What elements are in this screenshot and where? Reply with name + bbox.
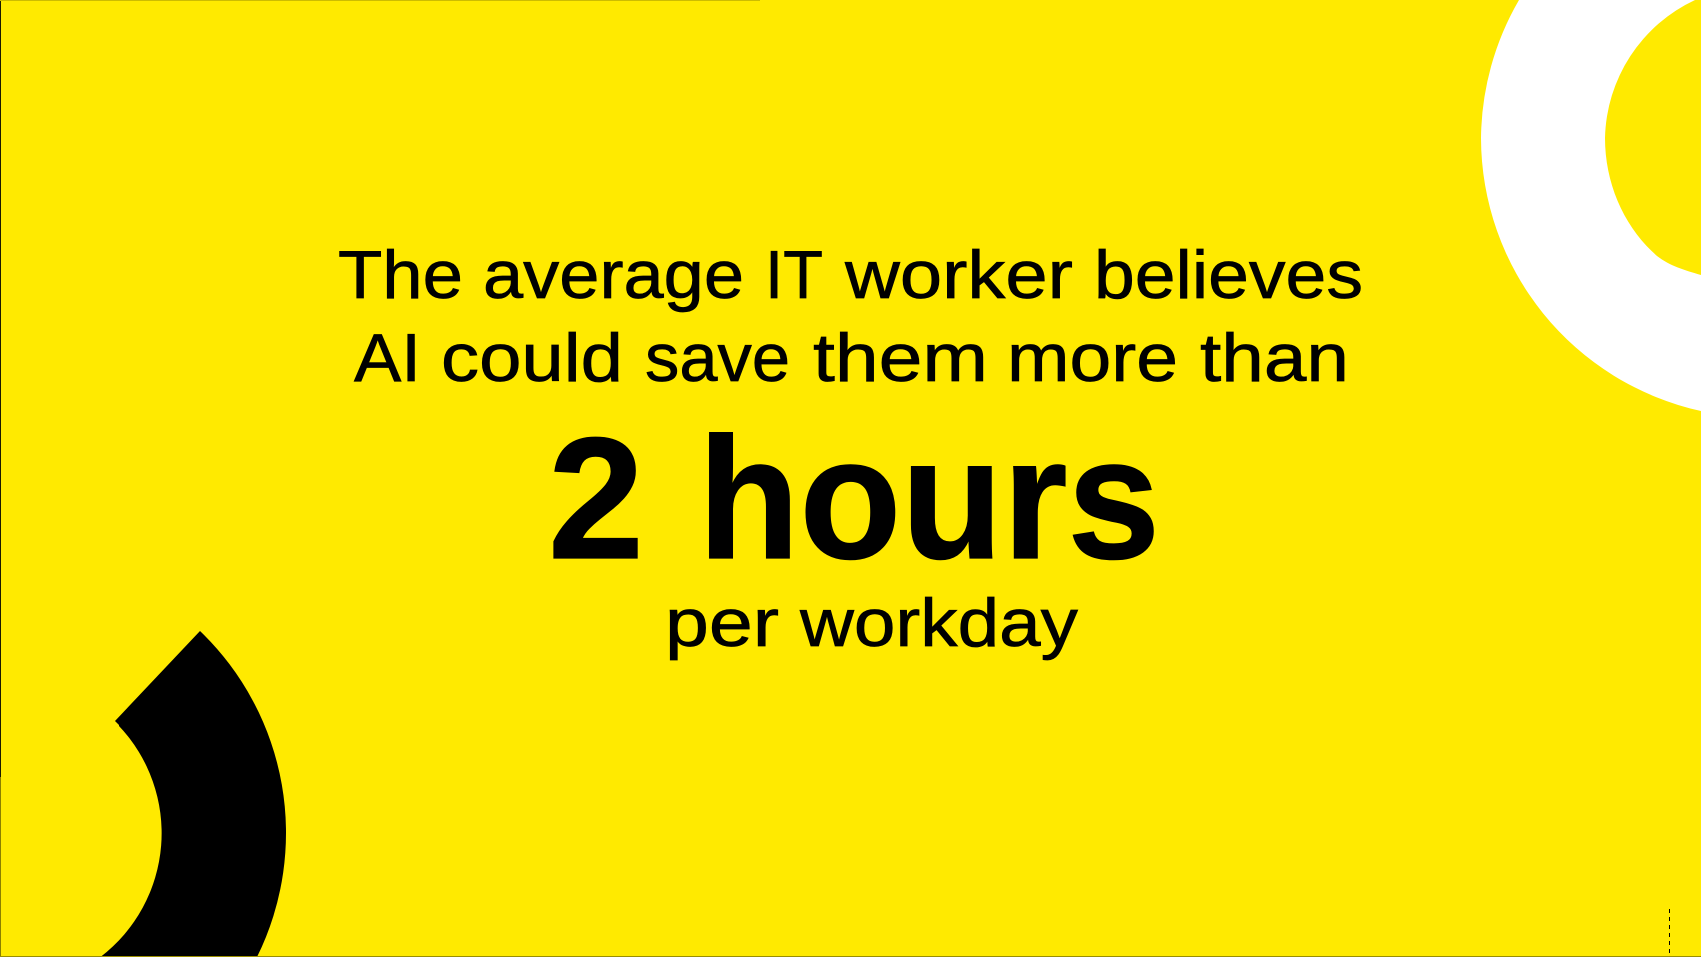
- closing text: per workday: per: [665, 585, 779, 661]
- heading text line 1: believes: [1094, 237, 1363, 313]
- decorative white arc top right: [1481, 0, 1701, 411]
- heading text line 2: [354, 320, 1349, 396]
- key figure: 2 hours: hours: [698, 401, 1160, 595]
- heading text line 2: than: [1200, 320, 1349, 396]
- closing text: per workday: workday: [799, 585, 1078, 661]
- heading text line 2: more: [1007, 320, 1178, 396]
- heading text line 1: worker: [844, 237, 1073, 313]
- key figure: 2 hours: 2: [548, 401, 644, 595]
- heading text line 1: The: [338, 237, 463, 313]
- closing text: per workday: [665, 585, 1078, 661]
- heading text line 2: them: [813, 320, 988, 396]
- heading text line 2: AI: [354, 320, 421, 396]
- top edge line: [0, 0, 760, 1]
- bottom edge line: [0, 956, 1701, 957]
- heading text line 1: average: [483, 237, 744, 313]
- heading text line 1: [338, 237, 1363, 313]
- small dashed tick bottom right: [1668, 909, 1670, 953]
- left edge line: [0, 0, 2, 777]
- heading text line 2: could: [441, 320, 623, 396]
- heading text line 2: save: [645, 320, 790, 396]
- decorative black arc bottom left: [100, 631, 286, 957]
- heading text line 1: IT: [765, 237, 823, 313]
